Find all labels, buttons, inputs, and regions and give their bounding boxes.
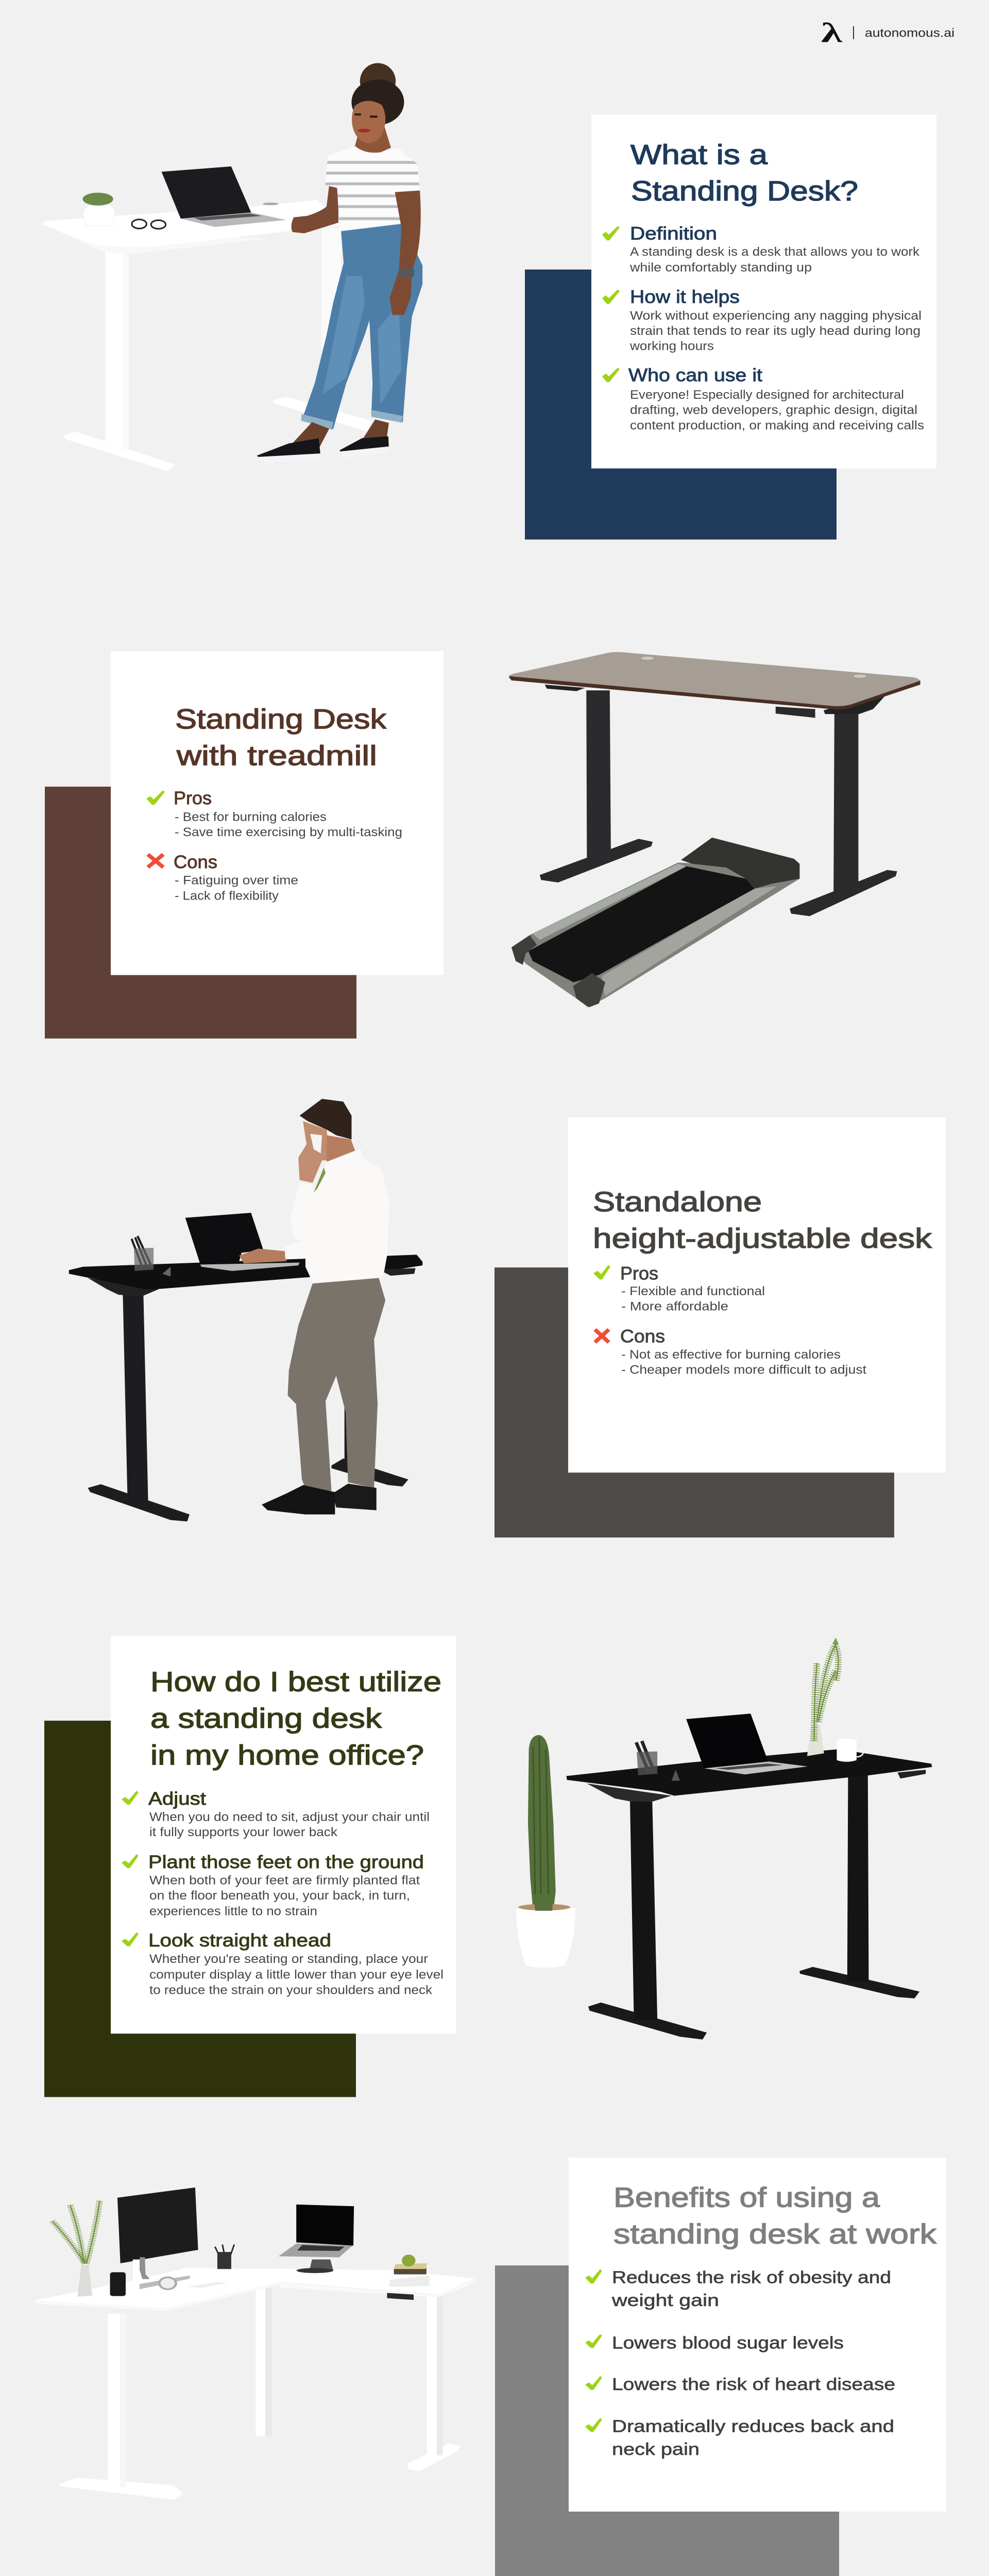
tip: look straight ahead	[122, 1930, 444, 1997]
cons list: - Lack of flexibility	[175, 889, 279, 903]
heading: a standing desk	[150, 1703, 382, 1734]
tip: plant those feet: Plant those feet on the ground	[148, 1852, 424, 1872]
tip: adjust: Adjust	[148, 1788, 206, 1808]
benefit: blood sugar: Lowers blood sugar levels	[612, 2334, 844, 2352]
heading: Standalone	[593, 1186, 762, 1217]
item: who can use it: Everyone! Especially designed for architectural	[630, 388, 904, 402]
pros list: - More affordable	[621, 1299, 728, 1313]
logo: autonomous.ai: λ	[821, 18, 843, 48]
tip: plant those feet: experiences little to no strain	[149, 1904, 317, 1918]
pros list: - Save time exercising by multi-tasking	[175, 825, 402, 839]
item: who can use it	[602, 365, 924, 432]
item: how it helps: working hours	[629, 339, 714, 353]
cons list: - Cheaper models more difficult to adjust	[621, 1363, 866, 1377]
heading: in my home office?	[150, 1739, 424, 1771]
illustration: black desk with cactus	[516, 1645, 932, 2040]
tip: look straight ahead: Whether you're seating or standing, place your	[149, 1952, 428, 1966]
illustration: man on phone at black desk	[69, 1099, 422, 1521]
illustration: woman standing at white desk	[41, 63, 422, 471]
block: brown backdrop	[45, 787, 356, 1039]
tip: plant those feet: When both of your feet are firmly planted flat	[149, 1873, 420, 1887]
heading: What is a	[630, 139, 768, 170]
tip: look straight ahead: Look straight ahead	[148, 1930, 331, 1950]
item: who can use it: content production, or making and receiving calls	[630, 418, 924, 432]
tip: plant those feet: on the floor beneath you, your back, in turn,	[149, 1889, 410, 1903]
heading: Standing Desk?	[631, 175, 858, 206]
card: usage tips	[111, 1636, 456, 2033]
item: definition	[602, 223, 919, 275]
item: how it helps: How it helps	[630, 286, 740, 307]
item: who can use it: drafting, web developers, graphic design, digital	[630, 403, 917, 417]
section 3: standalone height-adjustable desk	[69, 1099, 946, 1537]
benefit: back and neck pain: neck pain	[612, 2440, 700, 2459]
benefit: obesity: weight gain	[611, 2291, 719, 2310]
heading	[613, 2181, 937, 2249]
tip: adjust	[122, 1788, 430, 1839]
pros list	[146, 788, 402, 839]
block: charcoal backdrop	[494, 1267, 894, 1537]
cons list: - Not as effective for burning calories	[621, 1348, 841, 1362]
item: how it helps: strain that tends to rear its ugly head during long	[630, 324, 920, 338]
heading	[630, 139, 858, 206]
heading	[175, 703, 387, 771]
tip: plant those feet	[122, 1852, 424, 1918]
item: definition: Definition	[630, 223, 717, 244]
tip: adjust: When you do need to sit, adjust your chair until	[149, 1810, 430, 1824]
logo: autonomous.ai	[821, 18, 954, 48]
card: definition text	[591, 114, 936, 468]
block: grey backdrop	[495, 2265, 839, 2576]
cons list	[148, 852, 298, 903]
item: definition: A standing desk is a desk that allows you to work	[630, 245, 919, 259]
heading	[150, 1666, 441, 1771]
illustration: white L-shaped desk	[35, 2188, 475, 2500]
cons list: Cons	[620, 1326, 665, 1346]
pros list: - Flexible and functional	[621, 1284, 765, 1298]
tip: look straight ahead: to reduce the strain on your shoulders and neck	[149, 1983, 432, 1997]
pros list: - Best for burning calories	[175, 810, 327, 824]
benefit: back and neck pain: Dramatically reduces back and	[612, 2417, 894, 2436]
item: who can use it: Who can use it	[628, 365, 762, 385]
item: how it helps	[602, 286, 922, 353]
cons list	[595, 1326, 866, 1377]
pros list: Pros	[620, 1263, 658, 1283]
benefit: obesity	[585, 2268, 891, 2310]
block: navy backdrop	[525, 269, 837, 539]
illustration: desk and treadmill	[508, 652, 920, 1007]
item: how it helps: Work without experiencing any nagging physical	[630, 309, 922, 323]
heading: How do I best utilize	[150, 1666, 441, 1697]
tip: adjust: it fully supports your lower back	[149, 1825, 337, 1839]
pros list	[593, 1263, 765, 1313]
section 5: benefits of using a standing desk	[35, 2158, 946, 2576]
section 2: standing desk with treadmill	[45, 651, 920, 1039]
heading: standing desk at work	[613, 2218, 937, 2249]
heading: with treadmill	[176, 740, 377, 771]
block: olive backdrop	[44, 1721, 356, 2097]
card: standalone desk pros and cons	[568, 1117, 946, 1472]
logo: autonomous.ai: autonomous.ai	[865, 26, 954, 40]
cons list: - Fatiguing over time	[175, 874, 298, 887]
pros list: Pros	[174, 788, 212, 808]
heading: height-adjustable desk	[593, 1223, 932, 1254]
tip: look straight ahead: computer display a little lower than your eye level	[149, 1968, 444, 1982]
card: benefits list	[569, 2158, 946, 2512]
section 1: what is a standing desk	[41, 63, 936, 539]
section 4: how to best utilize a standing desk	[44, 1636, 932, 2097]
item: definition: while comfortably standing up	[629, 261, 812, 275]
benefit: heart disease: Lowers the risk of heart disease	[612, 2375, 895, 2394]
heading: Benefits of using a	[613, 2181, 880, 2213]
card: treadmill pros and cons	[111, 651, 444, 975]
heading	[593, 1186, 932, 1254]
cons list: Cons	[174, 852, 217, 872]
heading: Standing Desk	[175, 703, 387, 734]
benefit: back and neck pain	[585, 2417, 894, 2459]
benefit: obesity: Reduces the risk of obesity and	[612, 2268, 891, 2287]
